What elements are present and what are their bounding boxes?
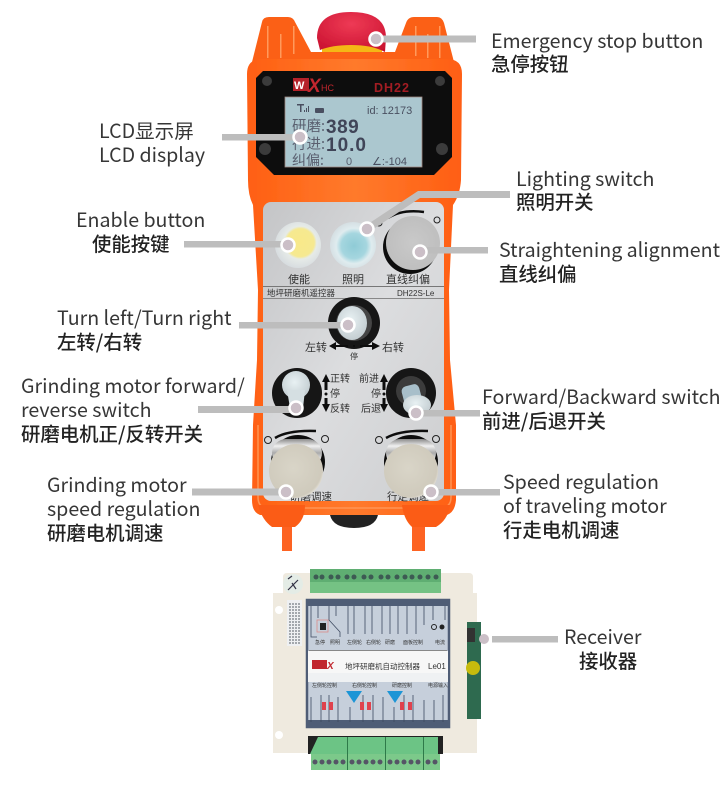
label: emergency stop: Emergency stop button [491,25,703,54]
controller housing [273,573,477,753]
turn labels: 停 [350,351,358,362]
label: grinding direction: Grinding motor forward/ [21,370,245,399]
label: enable: 使能按键 [92,228,170,257]
small panel labels: 电流 [435,639,445,646]
travel direction switch: 前进 [359,370,379,385]
remote body [247,59,462,515]
label: grinding speed: 研磨电机调速 [47,517,163,546]
label: receiver: Receiver [564,621,642,650]
grinding direction switch: 反转 [330,400,350,415]
mounting holes [275,606,283,739]
wiring panel: 地坪研磨机自动控制器 [345,661,420,672]
round sticker [283,574,303,594]
connector: LCD [222,130,306,144]
LCD screen: id: 12173 [367,105,412,117]
label: LCD: LCD display [99,139,205,168]
grinding direction switch: 停 [330,385,340,400]
LCD screen: 行进: [292,133,325,154]
label: grinding speed [47,469,200,546]
label: turn: Turn left/Turn right [57,302,232,331]
turn labels: 右转 [382,339,404,355]
connector: receiver [479,634,558,644]
grinding direction switch: 正转 [330,370,350,385]
label: lighting [516,163,654,215]
bottom terminals [308,736,443,770]
control panel: 地坪研磨机遥控器 [267,287,336,299]
lighting button [330,222,376,268]
label sticker [287,600,302,646]
LCD screen: 10.0 [326,135,367,156]
small panel labels: 左侧轮控制 [312,682,337,689]
body highlight edge [258,425,451,508]
connector: travel speed [424,486,500,498]
label: turn [57,302,232,355]
small panel labels: 急停 [315,639,325,646]
small panel labels: 右侧轮 [366,639,381,646]
LCD bezel [256,71,452,175]
control panel: 照明 [342,271,364,287]
label: travel direction [482,381,721,434]
label: travel speed: of traveling motor [503,490,667,519]
label: travel direction: Forward/Backward switch [482,381,721,410]
label: grinding speed: speed regulation [47,493,200,522]
connector: grinding speed [192,486,292,498]
label: grinding direction: 研磨电机正/反转开关 [21,418,203,447]
label: receiver: 接收器 [579,645,637,674]
enable button [275,222,321,268]
small panel labels: 研磨控制 [392,682,412,689]
receiver module [466,622,481,719]
control panel: 使能 [288,271,310,287]
label: travel direction: 前进/后退开关 [482,405,606,434]
label: grinding direction [21,370,245,447]
label: emergency stop: 急停按钮 [491,48,569,77]
label: lighting: Lighting switch [516,163,654,192]
label: emergency stop [491,25,703,77]
turn labels: 左转 [305,339,327,355]
control panel [263,202,444,501]
label: straightening: 直线纠偏 [499,258,577,287]
receiver controller [273,569,481,770]
travel speed knob: 行走调速 [387,489,429,504]
turn labels [305,339,404,362]
travel direction switch [359,368,436,418]
label: straightening [499,234,721,287]
small panel labels: 面板控制 [403,639,423,646]
small panel labels: 研磨 [385,639,395,646]
small panel labels: 照明 [330,639,340,646]
model name: DH22 [374,81,410,95]
wiring panel [307,600,449,727]
remote control [247,12,462,551]
small panel labels: 左侧轮 [347,639,362,646]
emergency stop button [317,12,386,56]
wiring panel: X [326,661,335,672]
label: travel speed: Speed regulation [503,466,659,495]
LCD screen: ∠:-104 [372,156,407,168]
connector: grinding direction [198,402,302,414]
label: grinding speed: Grinding motor [47,469,187,498]
label: lighting: 照明开关 [516,186,594,215]
small panel labels: 电源输入 [428,682,448,689]
brand logo [293,76,334,97]
grinding direction switch [272,368,350,418]
top terminals [310,569,441,593]
label: enable: Enable button [76,204,205,233]
remote feet and pins [258,505,450,551]
control panel: DH22S-Le [397,289,435,298]
connector: turn [239,318,354,332]
label: receiver [564,621,642,674]
LCD screen: 389 [326,117,359,138]
connector: travel direction [410,406,480,420]
travel speed knob [376,431,440,504]
travel direction switch: 停 [371,385,381,400]
LCD screen: 0 [346,156,352,168]
straightening knob [376,211,440,274]
small panel labels [312,639,448,689]
turn knob [328,297,380,349]
wiring panel: Le01 [428,662,446,671]
grinding speed knob: 研磨调速 [290,489,332,504]
travel direction switch: 后退 [361,400,381,415]
label: LCD [99,115,205,168]
connector: emergency stop [370,32,476,46]
remote ears [252,17,454,62]
control panel: 直线纠偏 [386,271,430,287]
label: turn: 左转/右转 [57,326,142,355]
grinding speed knob [264,431,332,504]
brand logo: W [294,80,305,92]
small panel labels: 右侧轮控制 [352,682,377,689]
brand logo: HC [321,83,334,93]
label: travel speed: 行走电机调速 [503,514,619,543]
connector: straightening [414,246,488,258]
connector: enable [184,238,294,252]
LCD screen: 研磨: [292,115,325,136]
label: travel speed [503,466,667,543]
LCD screen [285,97,422,170]
label: enable [76,204,205,257]
connector: lighting [360,191,510,236]
label: LCD: LCD显示屏 [99,115,194,144]
brand logo: X [307,76,322,97]
label: straightening: Straightening alignment [499,234,721,263]
LCD screen: 纠偏: [292,150,324,170]
label: grinding direction: reverse switch [21,394,152,423]
